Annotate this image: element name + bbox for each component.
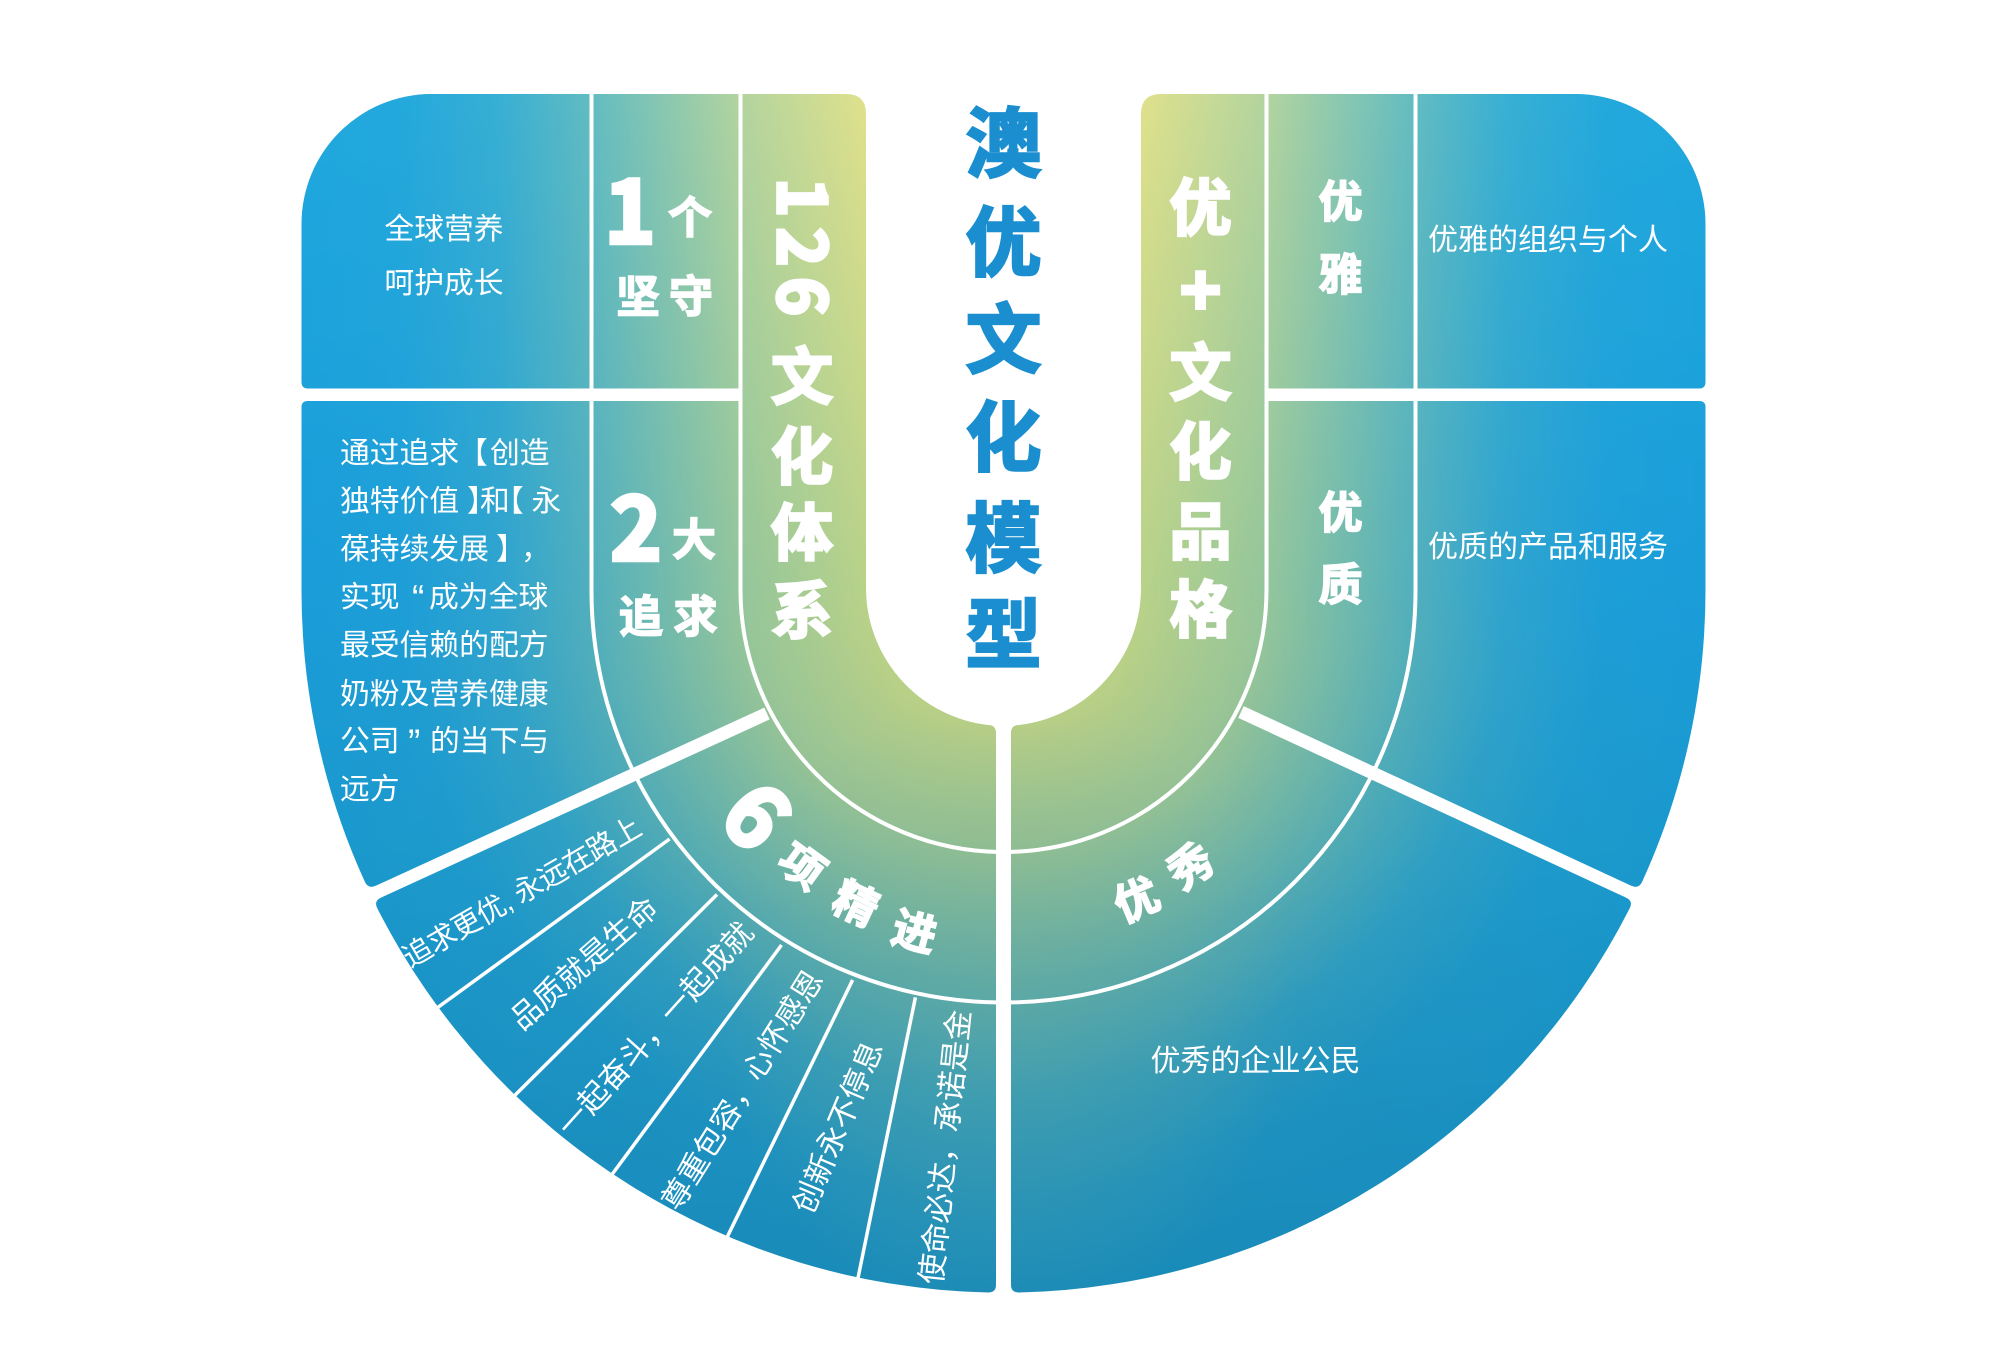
right limb: 优+文化品格 [1169,158,1232,650]
label 优: 优 [1169,158,1232,248]
text: 优质的产品和服务: 优质的产品和服务 [1428,531,1668,564]
value 2: 品质就是生命 [504,891,665,1037]
panel: pursuit paragraph: 】 [496,533,526,566]
panel: 2大追求 [611,460,718,645]
panel: pursuit paragraph: ， [521,533,551,566]
value 4: 尊重包容，心怀感恩 [655,965,830,1216]
panel: pursuit paragraph: “ [412,578,424,619]
value 3: 一起奋斗，一起成就 [551,916,760,1143]
panel: pursuit paragraph: 创造 [490,437,550,470]
panel: pursuit paragraph: 【 [458,437,488,470]
panel: 全球营养 呵护成长 [384,213,504,300]
text: 优雅的组织与个人: 优雅的组织与个人 [1428,224,1668,257]
label 文化体系: 文化体系 [771,327,833,651]
value 5: 创新永不停息 [787,1036,890,1219]
panel: pursuit paragraph: 【 [494,485,524,518]
char 项: 项 [767,825,840,902]
numeral 6: 6 [698,751,824,873]
panel: 全球营养 呵护成长: 全球营养 [384,213,504,246]
panel: pursuit paragraph: 最受信赖的配方 [340,629,549,662]
value 1: 追求更优, 永远在路上 [397,811,647,974]
label 大追求: 大追求 [619,504,718,645]
digits 126 rotated: 126 [758,178,854,316]
numeral 1: 1 [605,143,655,268]
char 进: 进 [886,892,945,965]
panel: pursuit paragraph: 的当下与 [430,725,549,758]
panel: 1个坚守 [605,143,713,325]
panel: 优质: 优质 [1318,477,1362,613]
panel: pursuit paragraph: 葆持续发展 [340,533,489,566]
plus sign: + [1179,250,1222,330]
numeral 2: 2 [611,460,661,585]
panel: pursuit paragraph: 成为全球 [429,581,548,614]
title: 澳优文化模型 [966,83,1042,684]
text: 优秀的企业公民: 优秀的企业公民 [1150,1045,1360,1078]
panel: pursuit paragraph: 远方 [340,773,400,806]
U-shaped gradient background [290,80,1720,1300]
left limb: 126 culture system [758,178,854,651]
panel: pursuit paragraph: 和 [480,485,510,518]
panel: 优雅: 优雅 [1318,166,1362,303]
ring divider lines [438,90,1416,1278]
panel: pursuit paragraph: 永 [532,485,561,518]
panel: pursuit paragraph: 公司 [340,725,400,758]
panel: 全球营养 呵护成长: 呵护成长 [384,267,504,300]
char 精: 精 [824,862,891,939]
panel: pursuit paragraph: 通过追求 [340,437,459,470]
char 秀: 秀 [1153,825,1225,902]
label 个坚守: 个坚守 [616,182,713,325]
panel: pursuit paragraph: 实现 [340,581,400,614]
panel: pursuit paragraph: 】 [467,485,497,518]
label 文化品格: 文化品格 [1169,323,1232,650]
panel: 6项精进 [698,751,945,965]
panel: pursuit paragraph: 奶粉及营养健康 [340,678,549,711]
value 6: 使命必达，承诺是金 [915,1008,977,1286]
char 优: 优 [1103,859,1168,935]
six rotated values [397,811,977,1286]
panel: pursuit paragraph: 独特价值 [340,485,459,518]
horizontal and diagonal gaps between panels [306,388,1701,899]
panel: 优秀 [1103,825,1225,935]
panel: pursuit paragraph: ” [408,722,420,763]
